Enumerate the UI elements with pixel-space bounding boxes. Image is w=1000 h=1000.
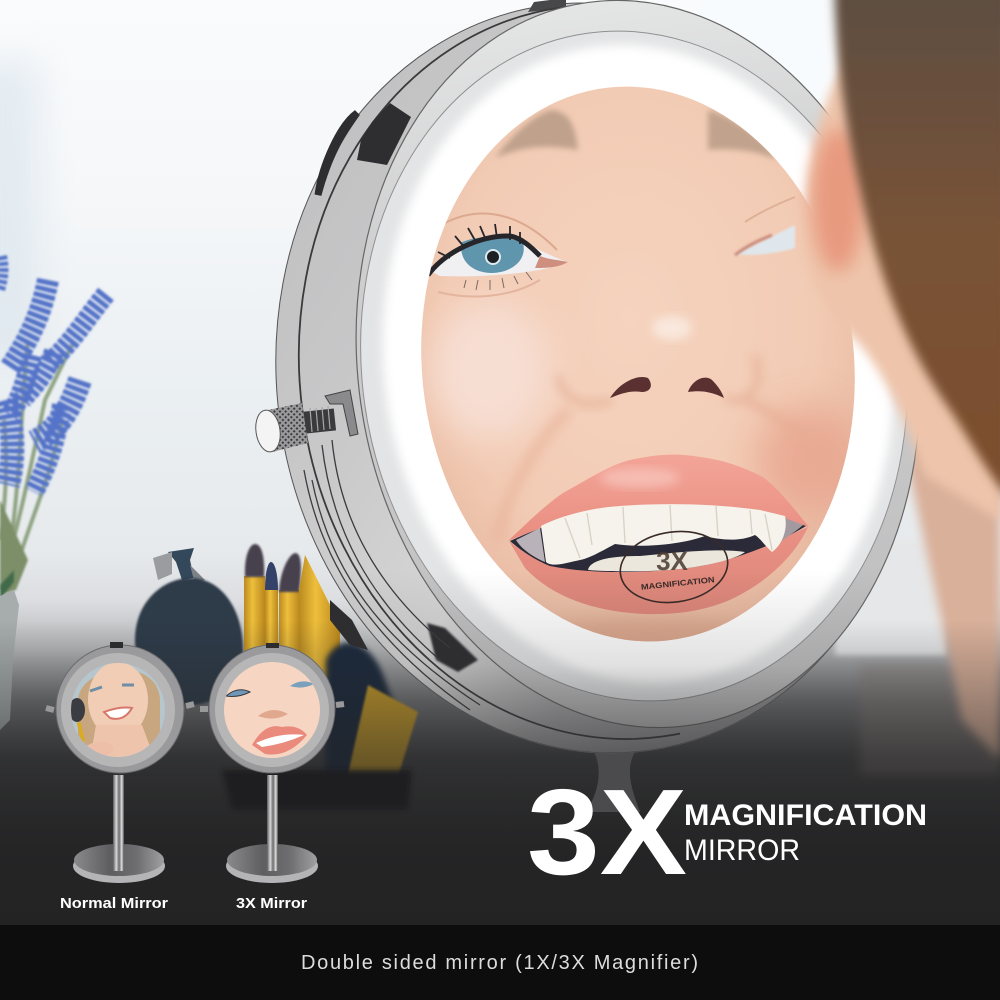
neck behind the mirror: [900, 430, 1000, 760]
iris: [461, 237, 524, 273]
face reflection: [421, 86, 855, 642]
foreground hair: [834, 0, 1000, 500]
vase: [0, 590, 19, 730]
bracket clip: [325, 390, 358, 436]
base: [73, 849, 165, 883]
eye corner: [535, 256, 568, 268]
nose highlight: [652, 316, 692, 340]
teeth: [256, 734, 304, 747]
gloss: [600, 468, 680, 488]
right cheek tint: [755, 405, 865, 515]
makeup brush: [69, 698, 85, 722]
frame: [56, 645, 184, 773]
upper lip: [508, 455, 809, 541]
light ring: [318, 0, 950, 737]
caption: Normal Mirror: Normal Mirror: [60, 896, 168, 912]
front rim: [310, 0, 966, 764]
chrome back band: [228, 0, 966, 795]
corner shade right: [782, 518, 803, 541]
spring: [302, 408, 336, 434]
nose: [258, 710, 288, 719]
spring coils: [310, 406, 330, 432]
face: [88, 663, 148, 726]
right nostril: [688, 378, 724, 398]
footer bar: [0, 925, 1000, 1000]
light ring: [215, 653, 329, 767]
frame: [209, 645, 335, 773]
knob end: [253, 409, 283, 453]
top knob: [528, 0, 566, 12]
chin shading: [563, 614, 734, 642]
top button: [266, 643, 279, 648]
lower lashes: [464, 272, 532, 290]
caption: 3X Mirror: 3X Mirror: [236, 896, 307, 912]
footer bar: Double sided mirror (1X/3X Magnifier): [301, 952, 698, 974]
pivots: [46, 704, 194, 710]
lower lip: [509, 527, 808, 614]
lower yoke arcs: [304, 440, 480, 710]
right eye: [290, 681, 314, 688]
tooth separations: [565, 505, 772, 558]
lavender plant: [0, 256, 106, 600]
stand stem of large mirror: [586, 745, 640, 812]
lips: [252, 726, 307, 755]
headline: MIRROR: [684, 834, 800, 867]
hair: [78, 670, 160, 745]
large mirror: [275, 0, 918, 754]
smile: [104, 708, 132, 719]
right eyebrow: [708, 110, 778, 160]
left nostril: [610, 377, 651, 398]
left eye lash line: [428, 236, 540, 275]
fingers: [86, 742, 114, 756]
left laugh line: [498, 410, 568, 540]
right eye: [735, 225, 795, 255]
pupil: [486, 250, 500, 264]
nose wings: [558, 355, 758, 404]
upper lashes: [438, 224, 520, 258]
base: [226, 849, 318, 883]
dark chrome reflections: [318, 103, 478, 672]
left eye: [433, 244, 568, 276]
left eye: [226, 690, 250, 696]
headline: [527, 764, 927, 900]
eyes: [90, 685, 134, 691]
corner shade left: [516, 528, 545, 562]
mirror lower shade: [351, 596, 860, 753]
headline: MAGNIFICATION: [684, 799, 927, 832]
magnification stamp: [616, 525, 732, 609]
headline: 3X: [527, 764, 687, 900]
light glow: [342, 12, 934, 716]
knurled cylinder: [268, 403, 308, 452]
magnification stamp: MAGNIFICATION: [640, 575, 715, 592]
left eyebrow: [495, 110, 578, 158]
neck and hand: [92, 725, 150, 757]
pivots: [200, 704, 344, 709]
small mirror: normal: [46, 642, 194, 883]
yoke bracket lines: [298, 6, 680, 740]
stem: [113, 775, 124, 871]
foreground cheek: [805, 0, 1000, 520]
lower teeth: [588, 550, 745, 571]
light ring: [61, 653, 175, 767]
mirror side knob: [253, 390, 358, 453]
upper teeth: [541, 504, 786, 565]
photo in mirror: [220, 660, 330, 760]
magnification stamp: 3X: [656, 546, 689, 576]
photo in mirror: [71, 663, 165, 757]
small mirror: 3X: [200, 643, 344, 883]
stem: [267, 775, 278, 871]
top button: [110, 642, 123, 648]
mouth interior: [510, 524, 806, 572]
dark gradient overlay behind products: [0, 620, 1000, 925]
left cheek highlight: [430, 300, 550, 440]
right laugh line: [746, 398, 842, 476]
makeup brushes and comb: [135, 544, 418, 810]
left eye crease: [445, 214, 557, 250]
